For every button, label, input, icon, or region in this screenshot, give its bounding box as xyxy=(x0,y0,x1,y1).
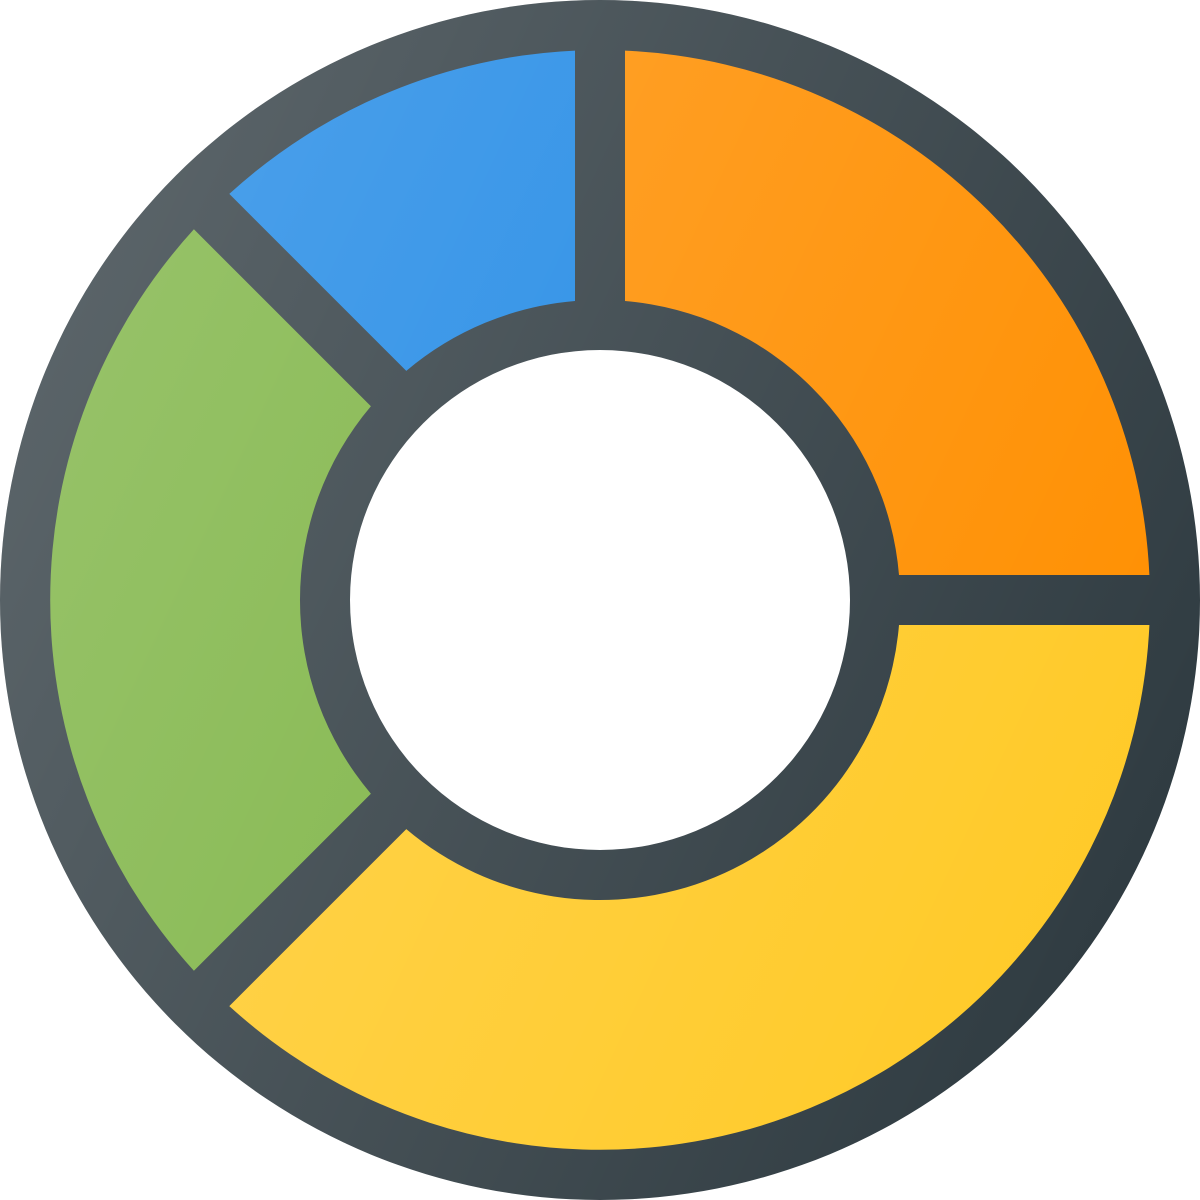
segment: green xyxy=(50,229,371,971)
segment: blue xyxy=(229,51,575,371)
segment: yellow xyxy=(229,625,1149,1150)
segment: orange xyxy=(625,51,1149,575)
